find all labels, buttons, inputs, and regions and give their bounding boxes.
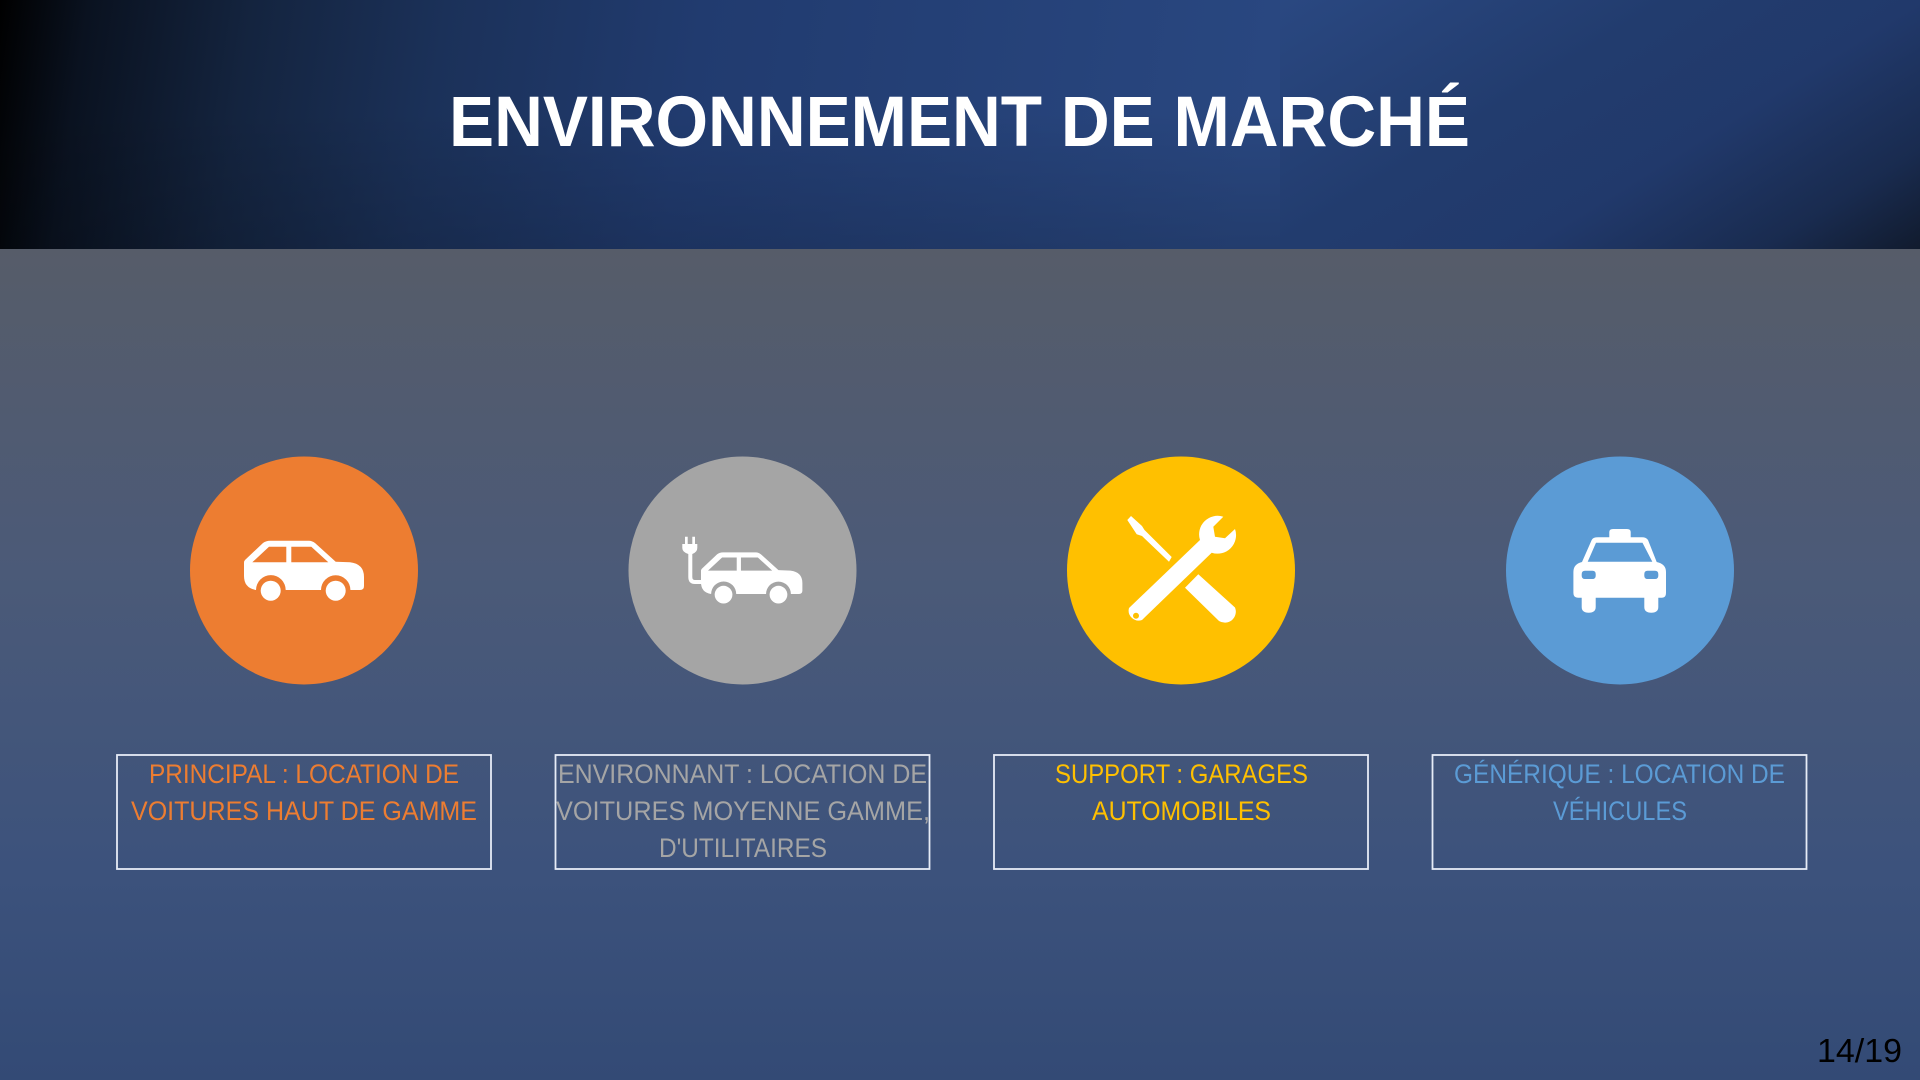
label box: principal: PRINCIPAL : LOCATION DE [149, 759, 459, 789]
title: ENVIRONNEMENT DE MARCHÉ [449, 83, 1470, 162]
label box: generique [1432, 755, 1806, 869]
page background [0, 249, 1920, 1080]
panel: principal [117, 456, 491, 869]
icon: grey circle with electric car [628, 456, 856, 684]
panel: support [994, 456, 1368, 869]
label box: principal: VOITURES HAUT DE GAMME [131, 796, 477, 826]
label box: generique: VÉHICULES [1553, 796, 1687, 826]
label box: principal [117, 755, 491, 869]
label box: environnant [556, 755, 930, 869]
header banner [0, 0, 1920, 249]
label box: environnant: D'UTILITAIRES [659, 833, 827, 863]
panel: environnant [556, 456, 930, 869]
label box: environnant: ENVIRONNANT : LOCATION DE [558, 759, 927, 789]
panel: generique [1432, 456, 1806, 869]
label box: generique: GÉNÉRIQUE : LOCATION DE [1454, 759, 1785, 789]
label box: support: SUPPORT : GARAGES [1055, 759, 1308, 789]
page number: 14/19 [1817, 1032, 1902, 1069]
label box: support [994, 755, 1368, 869]
label box: environnant: VOITURES MOYENNE GAMME, [556, 796, 930, 826]
icon: yellow circle with tools [1067, 456, 1295, 684]
label box: support: AUTOMOBILES [1092, 796, 1271, 826]
icon: orange circle with car [190, 456, 418, 684]
icon: blue circle with taxi [1506, 456, 1734, 684]
